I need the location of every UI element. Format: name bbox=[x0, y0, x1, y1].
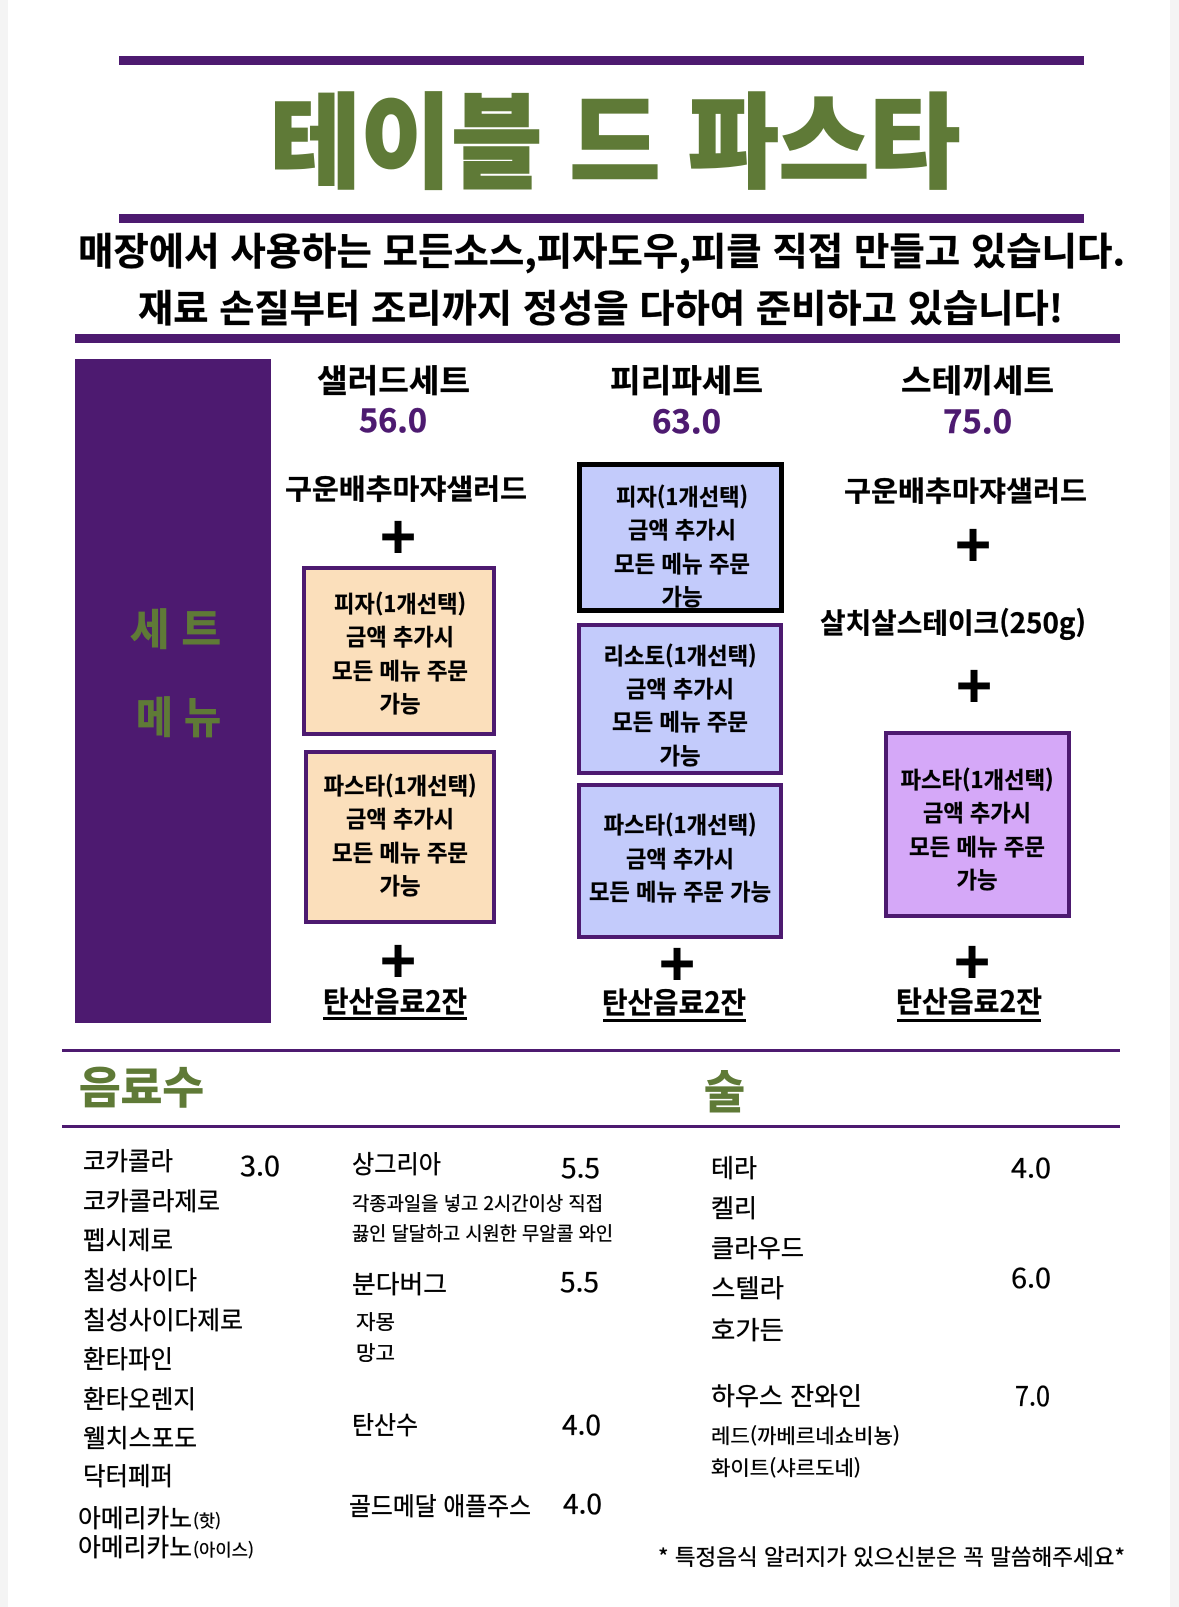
list: alcohol: 켈리 bbox=[711, 1189, 757, 1225]
option box: pizza: 금액 추가시 bbox=[346, 618, 454, 652]
panel: set menu side label: 메 뉴 bbox=[136, 684, 221, 746]
option box: risotto: 모든 메뉴 주문 bbox=[612, 703, 748, 737]
list: alcohol: 호가든 bbox=[711, 1311, 784, 1347]
list: sangria, bundaberg, soda, apple juice: 상그리아 bbox=[352, 1145, 441, 1181]
panel: steak set: 살치살스테이크(250g) bbox=[820, 602, 1086, 642]
panel: steak set: + bbox=[955, 510, 991, 580]
heading: soft drinks: 음료수 bbox=[79, 1052, 204, 1116]
panel: steak set: + bbox=[956, 651, 992, 721]
option box: pizza: 피자(1개선택) bbox=[334, 585, 466, 619]
panel: pizza pasta set: 63.0 bbox=[652, 397, 721, 443]
option box: pizza bbox=[580, 464, 782, 612]
list: alcohol: 클라우드 bbox=[711, 1229, 804, 1265]
option box: pasta: 가능 bbox=[956, 861, 998, 895]
heading: alcohol: 술 bbox=[704, 1056, 745, 1121]
list: sangria, bundaberg, soda, apple juice: 끓인 달달하고 시원한 무알콜 와인 bbox=[352, 1219, 613, 1246]
list: soft drinks: 칠성사이다제로 bbox=[83, 1301, 243, 1337]
list: sangria, bundaberg, soda, apple juice: 골드메달 애플주스 bbox=[349, 1487, 531, 1523]
panel: steak set: + bbox=[954, 927, 990, 997]
list: soft drinks bbox=[78, 1142, 280, 1564]
list: alcohol bbox=[711, 1147, 1051, 1481]
option box: pasta: 파스타(1개선택) bbox=[604, 806, 756, 840]
option box: pasta: 파스타(1개선택) bbox=[324, 767, 476, 801]
option box: pasta: 파스타(1개선택) bbox=[900, 761, 1054, 795]
panel: salad set: 56.0 bbox=[359, 396, 427, 442]
list: alcohol: 7.0 bbox=[1015, 1375, 1050, 1414]
panel: pizza pasta set: 피리파세트 bbox=[610, 356, 763, 402]
list: soft drinks: (핫) bbox=[193, 1507, 221, 1532]
drink note: 탄산음료2잔 bbox=[896, 979, 1042, 1021]
list: soft drinks: 환타오렌지 bbox=[83, 1380, 196, 1416]
option box: pasta: 금액 추가시 bbox=[346, 800, 454, 834]
list: sangria, bundaberg, soda, apple juice: 5.5 bbox=[561, 1147, 600, 1186]
list: alcohol: 테라 bbox=[711, 1149, 757, 1185]
drink note: 탄산음료2잔 bbox=[602, 980, 746, 1022]
drink note: 탄산음료2잔 bbox=[323, 979, 467, 1021]
intro text block bbox=[78, 221, 1125, 333]
list: sangria, bundaberg, soda, apple juice: 망고 bbox=[356, 1337, 395, 1366]
panel: steak set: 75.0 bbox=[943, 397, 1012, 443]
list: soft drinks: 아메리카노 bbox=[78, 1499, 192, 1535]
list: sangria, bundaberg, soda, apple juice: 분다버그 bbox=[352, 1265, 447, 1301]
list: alcohol: 하우스 잔와인 bbox=[711, 1377, 862, 1413]
option box: risotto: 금액 추가시 bbox=[626, 670, 734, 704]
panel: pizza pasta set: + bbox=[659, 929, 695, 999]
option box: pasta bbox=[579, 785, 781, 937]
list: sangria, bundaberg, soda, apple juice: 자몽 bbox=[356, 1306, 395, 1335]
list: sangria, bundaberg, soda, apple juice: 탄산수 bbox=[352, 1406, 418, 1442]
panel: set menu side label bbox=[75, 359, 271, 1023]
panel: set menu side label: 세 트 bbox=[130, 596, 221, 658]
intro text block: 매장에서 사용하는 모든소스,피자도우,피클 직접 만들고 있습니다. bbox=[78, 221, 1125, 276]
list: soft drinks: 환타파인 bbox=[83, 1340, 173, 1376]
option box: pasta: 가능 bbox=[380, 867, 420, 901]
option box: pizza: 금액 추가시 bbox=[628, 511, 736, 545]
list: soft drinks: 펩시제로 bbox=[83, 1221, 173, 1257]
panel: steak set: 스테끼세트 bbox=[901, 356, 1054, 402]
panel: steak set bbox=[820, 356, 1087, 1022]
list: soft drinks: 아메리카노 bbox=[78, 1528, 192, 1564]
list: alcohol: 레드(까베르네쇼비뇽) bbox=[711, 1420, 900, 1449]
option box: pasta: 모든 메뉴 주문 bbox=[332, 834, 468, 868]
list: soft drinks: 닥터페퍼 bbox=[83, 1457, 173, 1493]
panel: salad set: 구운배추마쟈샐러드 bbox=[285, 468, 527, 508]
option box: pizza: 피자(1개선택) bbox=[616, 478, 748, 512]
panel: salad set bbox=[285, 356, 527, 1021]
panel: pizza pasta set bbox=[579, 356, 782, 1022]
panel: steak set: 구운배추마쟈샐러드 bbox=[844, 470, 1087, 510]
option box: pasta bbox=[306, 752, 494, 922]
option box: pasta: 금액 추가시 bbox=[923, 794, 1031, 828]
list: alcohol: 4.0 bbox=[1011, 1147, 1051, 1186]
list: soft drinks: 코카콜라 bbox=[83, 1142, 173, 1178]
list: soft drinks: (아이스) bbox=[193, 1536, 254, 1561]
panel: salad set: + bbox=[380, 926, 416, 996]
allergy footnote: * 특정음식 알러지가 있으신분은 꼭 말씀해주세요* bbox=[658, 1540, 1125, 1572]
panel: salad set: + bbox=[380, 502, 416, 572]
list: sangria, bundaberg, soda, apple juice: 각종과일을 넣고 2시간이상 직접 bbox=[352, 1189, 603, 1216]
list: soft drinks: 코카콜라제로 bbox=[83, 1182, 220, 1218]
option box: pasta bbox=[886, 733, 1069, 916]
intro text block: 재료 손질부터 조리까지 정성을 다하여 준비하고 있습니다! bbox=[138, 278, 1063, 333]
option box: risotto: 리소토(1개선택) bbox=[604, 637, 756, 671]
option box: pizza: 가능 bbox=[380, 685, 420, 719]
option box: pizza bbox=[304, 568, 494, 734]
option box: pasta: 금액 추가시 bbox=[626, 840, 734, 874]
option box: pasta: 모든 메뉴 주문 bbox=[909, 828, 1045, 862]
list: sangria, bundaberg, soda, apple juice: 4.0 bbox=[562, 1404, 601, 1443]
option box: risotto bbox=[579, 625, 781, 773]
list: soft drinks: 칠성사이다 bbox=[83, 1261, 197, 1297]
list: sangria, bundaberg, soda, apple juice bbox=[349, 1145, 613, 1523]
panel: salad set: 샐러드세트 bbox=[317, 356, 470, 402]
option box: risotto: 가능 bbox=[660, 737, 700, 771]
list: alcohol: 6.0 bbox=[1011, 1257, 1051, 1296]
list: alcohol: 화이트(샤르도네) bbox=[711, 1452, 861, 1481]
list: soft drinks: 3.0 bbox=[240, 1145, 280, 1184]
list: sangria, bundaberg, soda, apple juice: 4.0 bbox=[563, 1483, 602, 1522]
option box: pizza: 가능 bbox=[662, 578, 702, 612]
option box: pasta: 모든 메뉴 주문 가능 bbox=[589, 873, 771, 907]
list: alcohol: 스텔라 bbox=[711, 1269, 784, 1305]
option box: pizza: 모든 메뉴 주문 bbox=[332, 652, 468, 686]
title: 테이블 드 파스타 bbox=[270, 60, 960, 209]
list: soft drinks: 웰치스포도 bbox=[83, 1419, 197, 1455]
option box: pizza: 모든 메뉴 주문 bbox=[614, 545, 750, 579]
list: sangria, bundaberg, soda, apple juice: 5.5 bbox=[560, 1261, 599, 1300]
